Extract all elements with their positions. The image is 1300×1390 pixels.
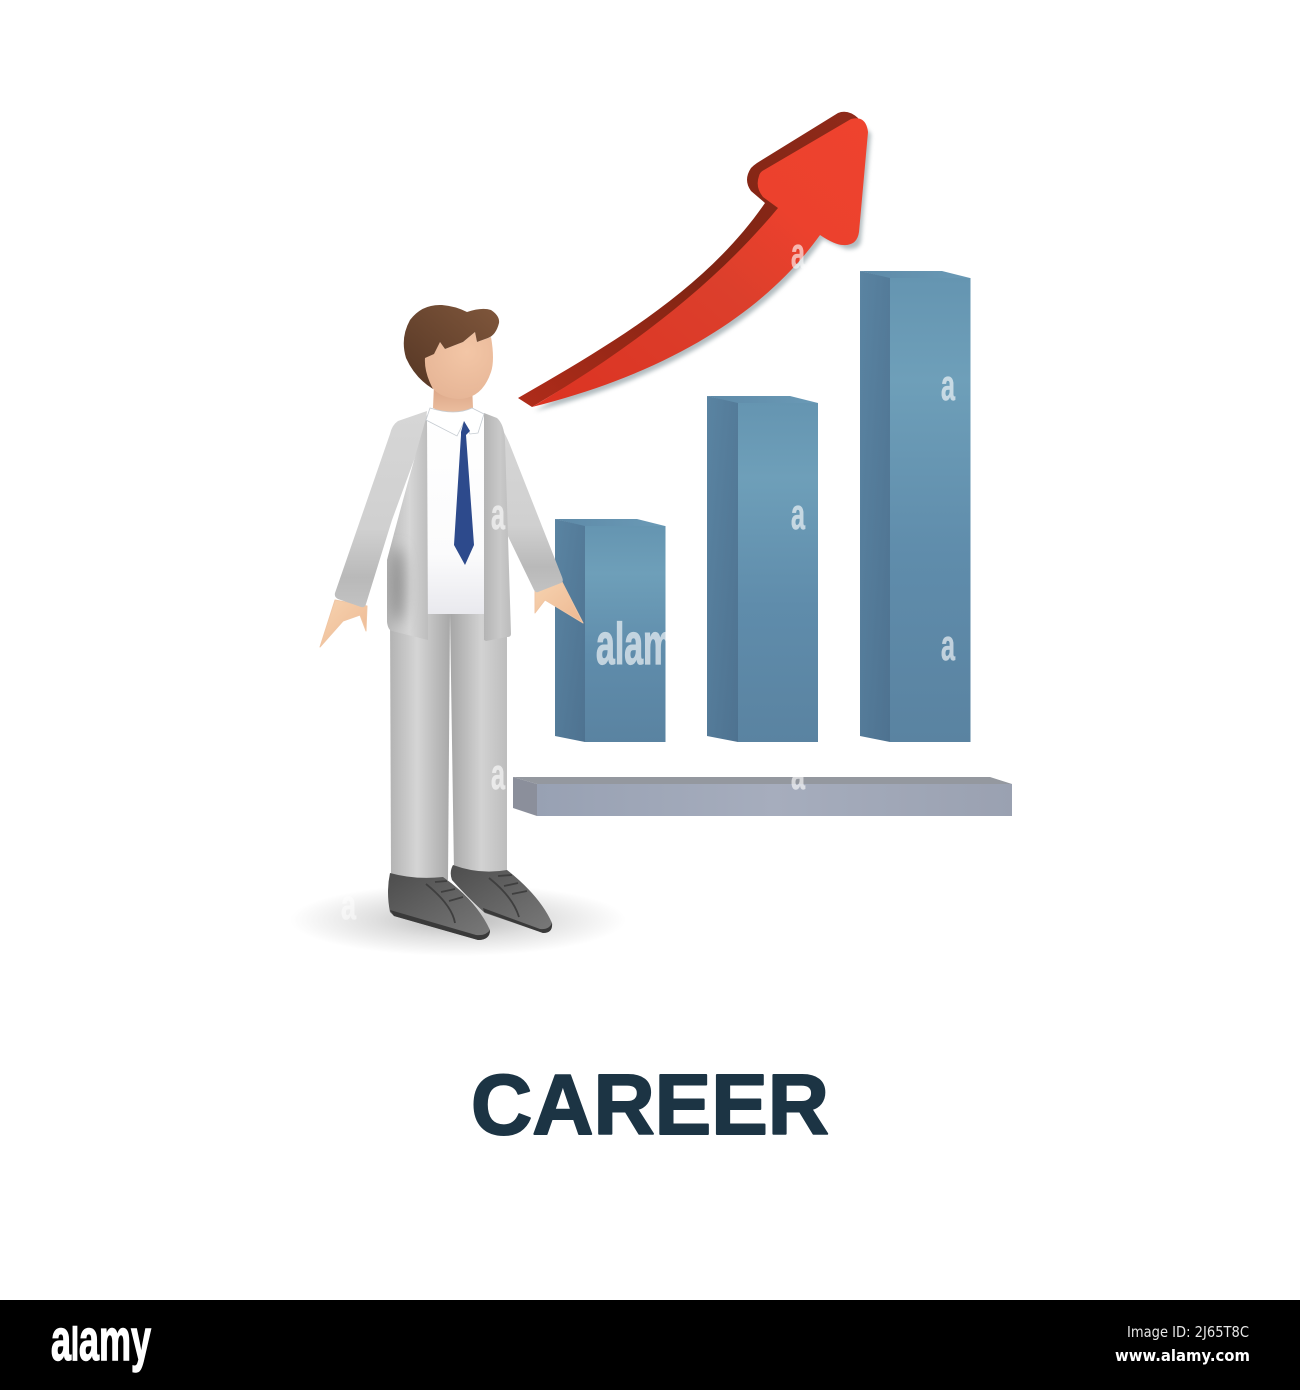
watermark marks: a [791,750,805,799]
base platform [513,777,1012,816]
right sleeve [490,425,563,592]
shoes [388,865,552,940]
jacket fold shadow [390,547,404,623]
footer bar [0,1300,1300,1390]
face [424,332,493,399]
watermark marks: a [491,750,505,799]
bar 3 [860,271,970,742]
watermark marks: a [791,490,805,539]
floor shadow [290,884,626,956]
shirt [427,415,484,614]
trousers [390,612,507,880]
watermark marks: a [341,881,356,928]
collar [426,408,484,436]
watermark marks: a [941,361,955,410]
tie [454,421,474,565]
watermark marks: a [791,229,805,278]
left hand [320,600,367,647]
watermark marks: a [491,490,505,539]
arrow dark side [518,112,860,407]
watermark marks: alamy [596,612,692,677]
businessman figure [320,305,583,940]
alamy logo: alamy [51,1308,151,1373]
watermark marks: a [941,621,955,670]
image id: Image ID: 2J65T8C [1127,1323,1249,1341]
arrow front face [532,118,868,407]
bar 2 [707,396,818,742]
right hand [535,580,583,623]
left sleeve [335,411,427,607]
arrow shadow [535,122,871,411]
bar 1 [555,519,666,742]
title: CAREER [471,1058,829,1153]
neck [433,385,473,418]
jacket right panel [484,413,511,641]
jacket left panel [387,415,428,640]
chart: rising bars with base [513,271,1012,816]
growth arrow [518,112,871,411]
website: www.alamy.com [1115,1346,1250,1365]
hair [404,305,499,389]
watermark marks [341,229,955,928]
